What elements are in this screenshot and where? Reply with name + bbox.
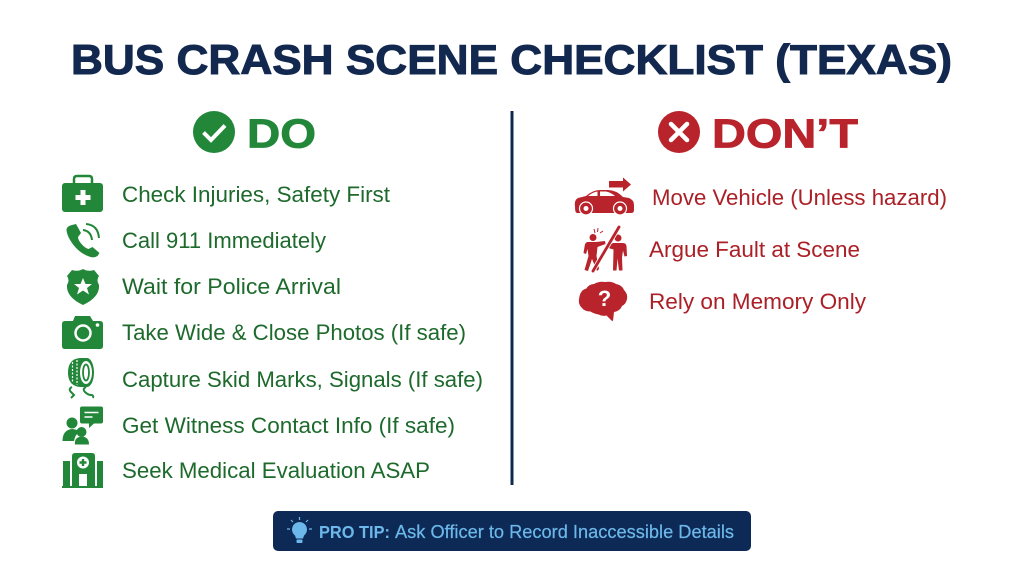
callout: pro tip: PRO TIP: bbox=[319, 522, 390, 542]
item: argue fault bbox=[584, 227, 860, 271]
item: check injuries: Check Injuries, Safety First bbox=[122, 182, 391, 207]
item: capture skid marks: Capture Skid Marks, Signals (If safe) bbox=[122, 367, 483, 392]
icon: camera bbox=[62, 316, 103, 349]
item: move vehicle: Move Vehicle (Unless hazard) bbox=[652, 185, 947, 210]
icon: witnesses with speech bubble bbox=[62, 406, 103, 444]
callout: pro tip: Ask Officer to Record Inaccessible Details bbox=[395, 522, 734, 542]
center divider bbox=[510, 111, 514, 485]
item: medical evaluation bbox=[62, 453, 430, 488]
icon: brain with question mark: ? bbox=[598, 286, 611, 311]
heading: don't bbox=[658, 110, 858, 156]
panel: don't bbox=[575, 110, 947, 321]
item: wait for police: Wait for Police Arrival bbox=[122, 274, 341, 299]
icon: tire with skid marks bbox=[68, 358, 94, 398]
icon: first aid kit bbox=[62, 176, 103, 212]
title: BUS CRASH SCENE CHECKLIST (TEXAS) bbox=[71, 36, 952, 83]
heading: do bbox=[193, 110, 316, 156]
heading: do: DO bbox=[247, 110, 316, 156]
item: take photos: Take Wide & Close Photos (If safe) bbox=[122, 320, 466, 345]
item: witness contact bbox=[62, 406, 455, 444]
item: medical evaluation: Seek Medical Evaluation ASAP bbox=[122, 458, 430, 483]
item: check injuries bbox=[62, 176, 391, 212]
icon: phone bbox=[66, 224, 100, 257]
icon: police badge bbox=[67, 269, 99, 305]
icon: light bulb bbox=[287, 517, 312, 543]
item: wait for police bbox=[67, 269, 341, 305]
panel: do bbox=[62, 110, 483, 488]
item: capture skid marks bbox=[68, 358, 483, 398]
item: argue fault: Argue Fault at Scene bbox=[649, 237, 860, 262]
icon: hospital bbox=[62, 453, 103, 488]
icon: arguing people with slash bbox=[584, 227, 627, 271]
callout: pro tip bbox=[273, 511, 751, 551]
item: rely on memory: Rely on Memory Only bbox=[649, 289, 867, 314]
item: move vehicle bbox=[575, 178, 947, 215]
icon: car with arrow bbox=[575, 178, 634, 215]
icon: brain with question mark bbox=[579, 282, 627, 321]
item: rely on memory bbox=[579, 282, 867, 321]
heading: don't: DON’T bbox=[712, 110, 858, 156]
item: call 911: Call 911 Immediately bbox=[122, 228, 327, 253]
item: take photos bbox=[62, 316, 466, 349]
item: call 911 bbox=[66, 224, 327, 257]
item: witness contact: Get Witness Contact Info (If safe) bbox=[122, 413, 455, 438]
